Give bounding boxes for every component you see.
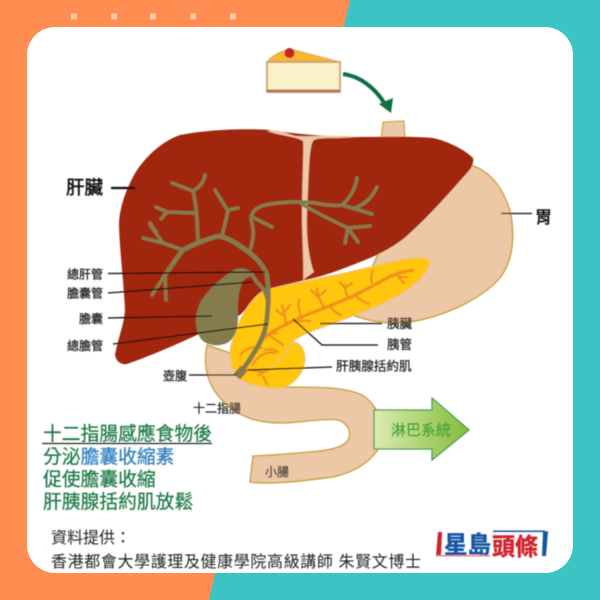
source credit [51,529,421,571]
liver [115,129,473,364]
pancreas [230,258,430,388]
stomach [350,165,513,323]
decorative dots [71,14,236,20]
label lines [108,188,532,375]
arrow: food to stomach [343,74,393,113]
arrow: lymphatic system: 淋巴系統 [391,422,451,439]
organ labels: 肝臟 [66,177,104,198]
organ labels: 十二指腸 [193,402,241,416]
organ labels: 小腸 [265,465,289,479]
gallbladder [196,268,252,345]
small intestine and duodenum [206,345,382,483]
bile ducts [143,175,377,374]
organ labels: 胰管 [387,337,412,352]
arrow: lymphatic system [374,398,469,460]
logo [436,530,548,561]
falciform ligament [267,130,356,280]
pancreatic duct [240,270,413,384]
callout: duodenum explanation: 分泌膽囊收縮素 [43,446,174,467]
logo: 星島 [444,532,491,559]
organ labels [66,177,552,479]
callout: duodenum explanation: 肝胰腺括約肌放鬆 [43,491,193,512]
icon: cheesecake [267,48,340,92]
callout: duodenum explanation: 促使膽囊收縮 [43,468,156,490]
organ labels: 胃 [535,208,552,227]
callout: duodenum explanation [42,422,212,512]
organ labels: 膽囊管 [67,286,103,300]
organ labels: 壺腹 [163,369,187,383]
source credit: 香港都會大學護理及健康學院高級講師 朱賢文博士 [51,553,421,571]
ampulla [234,366,247,379]
organ labels: 總肝管 [67,266,103,282]
logo: 頭條 [492,534,538,561]
pancreatic head fold [270,342,292,366]
organ labels: 膽囊 [79,311,103,326]
source credit: 資料提供： [51,529,131,547]
callout: duodenum explanation: 十二指腸感應食物後 [43,422,212,444]
organ labels: 肝胰腺括約肌 [336,360,412,374]
organ labels: 胰臟 [387,317,413,331]
esophagus [381,121,405,139]
organ labels: 總膽管 [67,338,103,353]
